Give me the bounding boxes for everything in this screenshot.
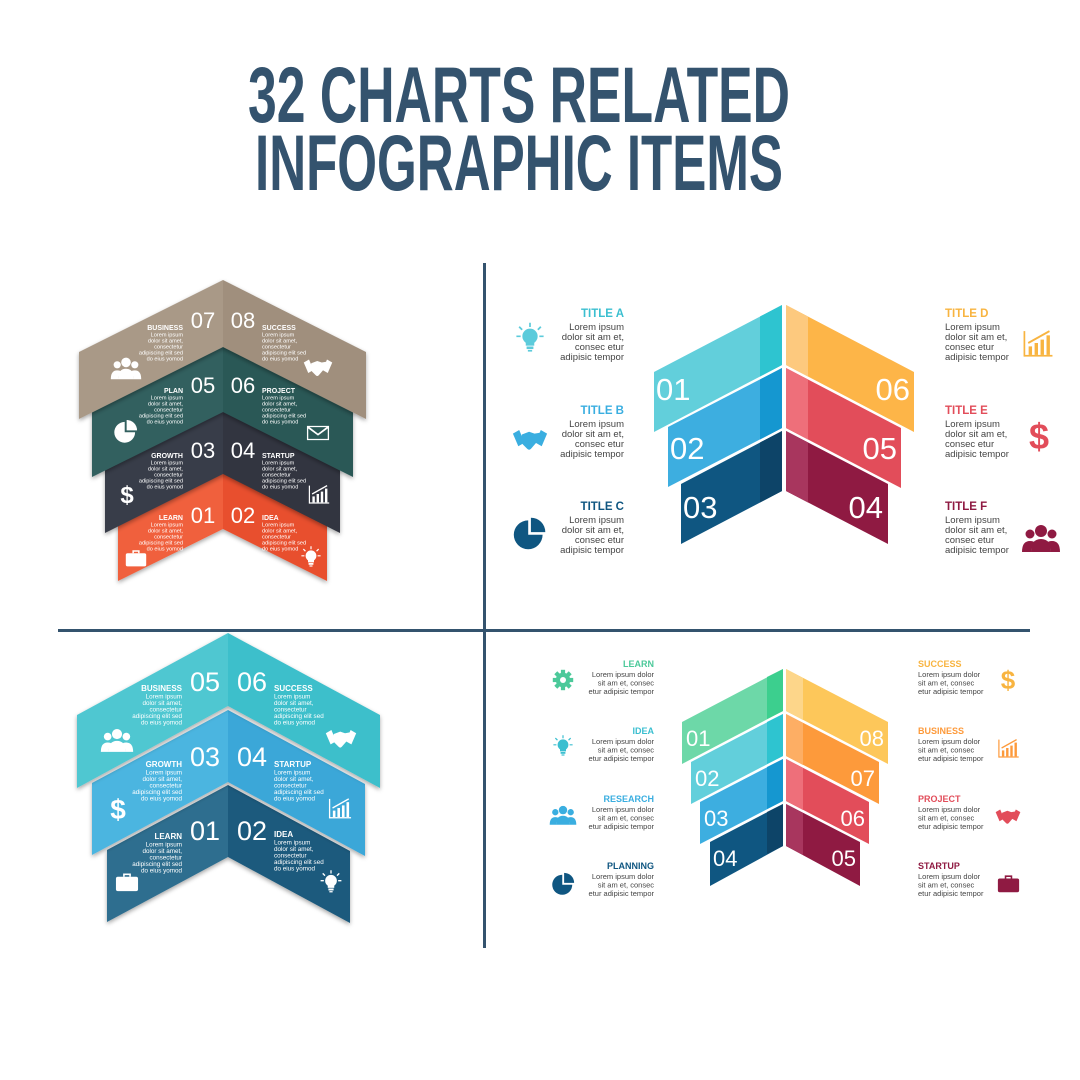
- icons: $: [110, 794, 126, 825]
- right labels: Lorem ipsum dolor: [918, 872, 981, 881]
- left labels: LEARN: [159, 515, 183, 522]
- left labels: etur adipisic tempor: [589, 822, 654, 831]
- right labels: do eius yomod: [262, 356, 298, 362]
- right labels: do eius yomod: [262, 484, 298, 490]
- right titles: TITLE E: [945, 405, 988, 417]
- left titles: consec etur: [575, 439, 624, 450]
- right labels: IDEA: [274, 830, 293, 839]
- right titles: Lorem ipsum: [945, 419, 1000, 430]
- left labels: etur adipisic tempor: [589, 754, 654, 763]
- left labels: Lorem ipsum dolor: [592, 737, 655, 746]
- left labels: consectetur: [154, 534, 183, 540]
- right titles: adipisic tempor: [945, 449, 1009, 460]
- right titles: consec etur: [945, 342, 994, 353]
- segment 07: 07: [851, 766, 875, 791]
- segment 07: [786, 714, 879, 804]
- left labels: GROWTH: [151, 453, 183, 460]
- left titles: adipisic tempor: [560, 545, 624, 556]
- chevron 05 06: [77, 633, 380, 788]
- left labels: LEARN: [154, 832, 182, 841]
- numbers: 06: [231, 373, 255, 398]
- numbers: 04: [237, 742, 267, 772]
- numbers: [191, 308, 255, 528]
- right labels: SUCCESS: [918, 659, 962, 669]
- right titles: [945, 308, 1009, 556]
- right labels: do eius yomod: [262, 420, 298, 426]
- segment 06: 06: [876, 372, 910, 407]
- left labels: consectetur: [149, 854, 182, 862]
- right titles: consec etur: [945, 439, 994, 450]
- left labels: dolor sit amet,: [142, 776, 182, 783]
- right labels: PROJECT: [918, 794, 961, 804]
- left titles: consec etur: [575, 342, 624, 353]
- panel: bottom-left chevron chart: [77, 633, 380, 923]
- left labels: consectetur: [154, 408, 183, 414]
- right labels: [274, 684, 324, 872]
- numbers: 02: [231, 503, 255, 528]
- left labels: do eius yomod: [147, 484, 183, 490]
- left labels: Lorem ipsum dolor: [592, 872, 655, 881]
- right labels: etur adipisic tempor: [918, 687, 984, 696]
- right labels: adipiscing elit sed: [262, 478, 306, 484]
- right labels: adipiscing elit sed: [262, 414, 306, 420]
- right labels: [262, 325, 306, 552]
- numbers: 03: [191, 438, 215, 463]
- right labels: SUCCESS: [262, 325, 296, 332]
- right labels: SUCCESS: [274, 684, 313, 693]
- left titles: [560, 308, 624, 556]
- right labels: dolor sit amet,: [274, 846, 314, 853]
- right labels: Lorem ipsum: [262, 332, 295, 338]
- right labels: etur adipisic tempor: [918, 754, 984, 763]
- left labels: Lorem ipsum: [151, 332, 183, 338]
- left titles: Lorem ipsum: [569, 322, 624, 333]
- right labels: etur adipisic tempor: [918, 889, 984, 898]
- left labels: sit am et, consec: [598, 880, 654, 890]
- left titles: Lorem ipsum: [569, 515, 624, 526]
- left labels: IDEA: [632, 726, 654, 736]
- segment 01: [682, 669, 783, 764]
- left labels: PLANNING: [607, 861, 654, 871]
- left labels: adipiscing elit sed: [139, 478, 183, 484]
- right labels: dolor sit amet,: [274, 700, 314, 707]
- left labels: dolor sit amet,: [142, 848, 182, 855]
- right labels: consectetur: [262, 472, 291, 478]
- right titles: Lorem ipsum: [945, 515, 1000, 526]
- left labels: consectetur: [149, 706, 182, 714]
- numbers: 07: [191, 308, 215, 333]
- left labels: dolor sit amet,: [148, 338, 183, 344]
- title: [248, 50, 790, 207]
- right labels: Lorem ipsum: [274, 840, 310, 846]
- right titles: TITLE F: [945, 501, 987, 513]
- right titles: adipisic tempor: [945, 545, 1009, 556]
- left labels: adipiscing elit sed: [132, 713, 182, 720]
- right labels: dolor sit amet,: [274, 776, 314, 783]
- numbers: 06: [237, 667, 267, 697]
- right labels: Lorem ipsum dolor: [918, 670, 981, 679]
- segment 06: [786, 759, 869, 844]
- numbers: 01: [191, 503, 215, 528]
- segment 04: 04: [849, 490, 883, 525]
- right labels: consectetur: [262, 408, 291, 414]
- left labels: do eius yomod: [141, 720, 182, 726]
- left labels: BUSINESS: [141, 684, 183, 693]
- left titles: consec etur: [575, 535, 624, 546]
- right titles: dolor sit am et,: [945, 525, 1007, 536]
- right labels: Lorem ipsum dolor: [918, 805, 981, 814]
- right labels: BUSINESS: [918, 726, 964, 736]
- left labels: do eius yomod: [141, 868, 182, 874]
- right labels: Lorem ipsum: [262, 460, 295, 466]
- left labels: Lorem ipsum: [146, 842, 182, 848]
- left labels: consectetur: [154, 472, 183, 478]
- segment 03: [700, 759, 783, 844]
- segment 04: 04: [713, 846, 737, 871]
- icons: [513, 323, 1060, 552]
- right labels: [918, 659, 984, 898]
- segment 03: 03: [704, 806, 728, 831]
- left labels: BUSINESS: [147, 325, 183, 332]
- left labels: Lorem ipsum dolor: [592, 805, 655, 814]
- numbers: 02: [237, 816, 267, 846]
- right labels: sit am et, consec: [918, 746, 975, 754]
- left labels: PLAN: [164, 388, 183, 395]
- segment 05: 05: [832, 846, 856, 871]
- segment 04: [786, 431, 888, 544]
- left labels: dolor sit amet,: [148, 402, 183, 408]
- segment 08: 08: [860, 726, 884, 751]
- right labels: STARTUP: [262, 453, 295, 460]
- right titles: Lorem ipsum: [945, 322, 1000, 333]
- left labels: sit am et, consec: [598, 814, 654, 822]
- left labels: [139, 325, 183, 552]
- left labels: sit am et, consec: [598, 678, 654, 688]
- right labels: dolor sit amet,: [262, 466, 298, 472]
- left labels: do eius yomod: [147, 420, 183, 426]
- left titles: Lorem ipsum: [569, 419, 624, 430]
- right labels: consectetur: [262, 344, 291, 350]
- icons: [111, 358, 332, 567]
- numbers: 05: [190, 667, 220, 697]
- left titles: adipisic tempor: [560, 352, 624, 363]
- left labels: consectetur: [154, 344, 183, 350]
- icons: $: [1001, 665, 1016, 695]
- left labels: [132, 684, 183, 874]
- right labels: adipiscing elit sed: [262, 350, 306, 356]
- chevron 05 06 teal: [92, 345, 353, 477]
- segment 02: 02: [670, 431, 704, 466]
- icons: [101, 729, 356, 892]
- segment 03: 03: [683, 490, 717, 525]
- right titles: dolor sit am et,: [945, 332, 1007, 343]
- left labels: adipiscing elit sed: [139, 414, 183, 420]
- icons: $: [120, 482, 134, 509]
- left labels: do eius yomod: [147, 356, 183, 362]
- icons: $: [1029, 416, 1049, 457]
- segment 06: 06: [841, 806, 865, 831]
- left labels: Lorem ipsum: [146, 770, 182, 776]
- segment 02: 02: [695, 766, 719, 791]
- left labels: sit am et, consec: [598, 746, 654, 754]
- right labels: adipiscing elit sed: [274, 859, 324, 866]
- segment 01: 01: [686, 726, 710, 751]
- left labels: dolor sit amet,: [148, 466, 183, 472]
- right titles: TITLE D: [945, 308, 988, 320]
- segment 01: [654, 305, 782, 432]
- left labels: do eius yomod: [141, 796, 182, 802]
- right labels: IDEA: [262, 515, 279, 522]
- chevron 03 04 dark: [105, 408, 340, 533]
- right labels: sit am et, consec: [918, 814, 975, 822]
- left labels: Lorem ipsum: [151, 460, 183, 466]
- left titles: adipisic tempor: [560, 449, 624, 460]
- left labels: [589, 659, 655, 898]
- left titles: dolor sit am et,: [562, 525, 624, 536]
- segment 02: [691, 714, 783, 804]
- left labels: Lorem ipsum: [146, 694, 182, 700]
- numbers: 04: [231, 438, 255, 463]
- panel: bottom-right paired arrow chart: [550, 659, 1020, 898]
- left titles: TITLE C: [581, 501, 624, 513]
- icons: [550, 665, 1020, 895]
- right labels: STARTUP: [918, 861, 960, 871]
- panel: top-left chevron chart: [79, 280, 366, 581]
- right labels: Lorem ipsum: [274, 770, 310, 776]
- right labels: Lorem ipsum: [262, 522, 295, 528]
- segment 05: [786, 368, 901, 488]
- left labels: LEARN: [623, 659, 654, 669]
- chevron 01 02 orange: [118, 472, 327, 581]
- segment 02: [668, 368, 782, 487]
- right labels: etur adipisic tempor: [918, 822, 984, 831]
- chevron 07 08 brown: [79, 280, 366, 419]
- right labels: adipiscing elit sed: [262, 540, 306, 546]
- right labels: Lorem ipsum dolor: [918, 737, 981, 746]
- title: 32 CHARTS RELATED: [248, 50, 790, 139]
- title: INFOGRAPHIC ITEMS: [255, 118, 783, 207]
- right labels: dolor sit amet,: [262, 402, 298, 408]
- left titles: dolor sit am et,: [562, 332, 624, 343]
- left titles: dolor sit am et,: [562, 429, 624, 440]
- left labels: etur adipisic tempor: [589, 687, 654, 696]
- right labels: Lorem ipsum: [274, 694, 310, 700]
- right labels: Lorem ipsum: [262, 396, 295, 402]
- right labels: sit am et, consec: [918, 880, 975, 890]
- right labels: do eius yomod: [274, 720, 315, 726]
- left labels: etur adipisic tempor: [589, 889, 654, 898]
- segment 08: [786, 669, 888, 764]
- left labels: Lorem ipsum dolor: [592, 670, 655, 679]
- segment 05: [786, 804, 860, 886]
- left titles: TITLE B: [581, 405, 624, 417]
- right labels: STARTUP: [274, 760, 312, 769]
- numbers: 01: [190, 816, 220, 846]
- numbers: [190, 667, 267, 846]
- left labels: Lorem ipsum: [151, 522, 183, 528]
- chevron 03 04: [92, 710, 365, 856]
- right titles: consec etur: [945, 535, 994, 546]
- segment 01: 01: [656, 372, 690, 407]
- right labels: do eius yomod: [262, 546, 298, 552]
- right labels: consectetur: [262, 534, 291, 540]
- right labels: do eius yomod: [274, 866, 315, 872]
- left labels: consectetur: [149, 782, 182, 790]
- numbers: 05: [191, 373, 215, 398]
- right labels: PROJECT: [262, 388, 296, 395]
- segment 03: [681, 431, 782, 544]
- panel: top-right paired arrow chart: [513, 305, 1060, 556]
- left labels: adipiscing elit sed: [139, 350, 183, 356]
- right labels: consectetur: [274, 852, 307, 860]
- left labels: Lorem ipsum: [151, 396, 183, 402]
- right titles: dolor sit am et,: [945, 429, 1007, 440]
- left labels: dolor sit amet,: [142, 700, 182, 707]
- right labels: dolor sit amet,: [262, 338, 298, 344]
- left titles: TITLE A: [581, 308, 624, 320]
- right labels: consectetur: [274, 706, 307, 714]
- right titles: adipisic tempor: [945, 352, 1009, 363]
- segment 06: [786, 305, 914, 432]
- left labels: adipiscing elit sed: [139, 540, 183, 546]
- left labels: adipiscing elit sed: [132, 861, 182, 868]
- numbers: 08: [231, 308, 255, 333]
- left labels: RESEARCH: [603, 794, 654, 804]
- right labels: sit am et, consec: [918, 678, 975, 688]
- segment 04: [710, 804, 783, 886]
- right labels: adipiscing elit sed: [274, 789, 324, 796]
- chevron 01 02: [107, 785, 350, 923]
- left labels: adipiscing elit sed: [132, 789, 182, 796]
- right labels: consectetur: [274, 782, 307, 790]
- right labels: adipiscing elit sed: [274, 713, 324, 720]
- right labels: do eius yomod: [274, 796, 315, 802]
- right labels: dolor sit amet,: [262, 528, 298, 534]
- numbers: 03: [190, 742, 220, 772]
- segment 05: 05: [863, 431, 897, 466]
- left labels: do eius yomod: [147, 546, 183, 552]
- left labels: dolor sit amet,: [148, 528, 183, 534]
- left labels: GROWTH: [146, 760, 182, 769]
